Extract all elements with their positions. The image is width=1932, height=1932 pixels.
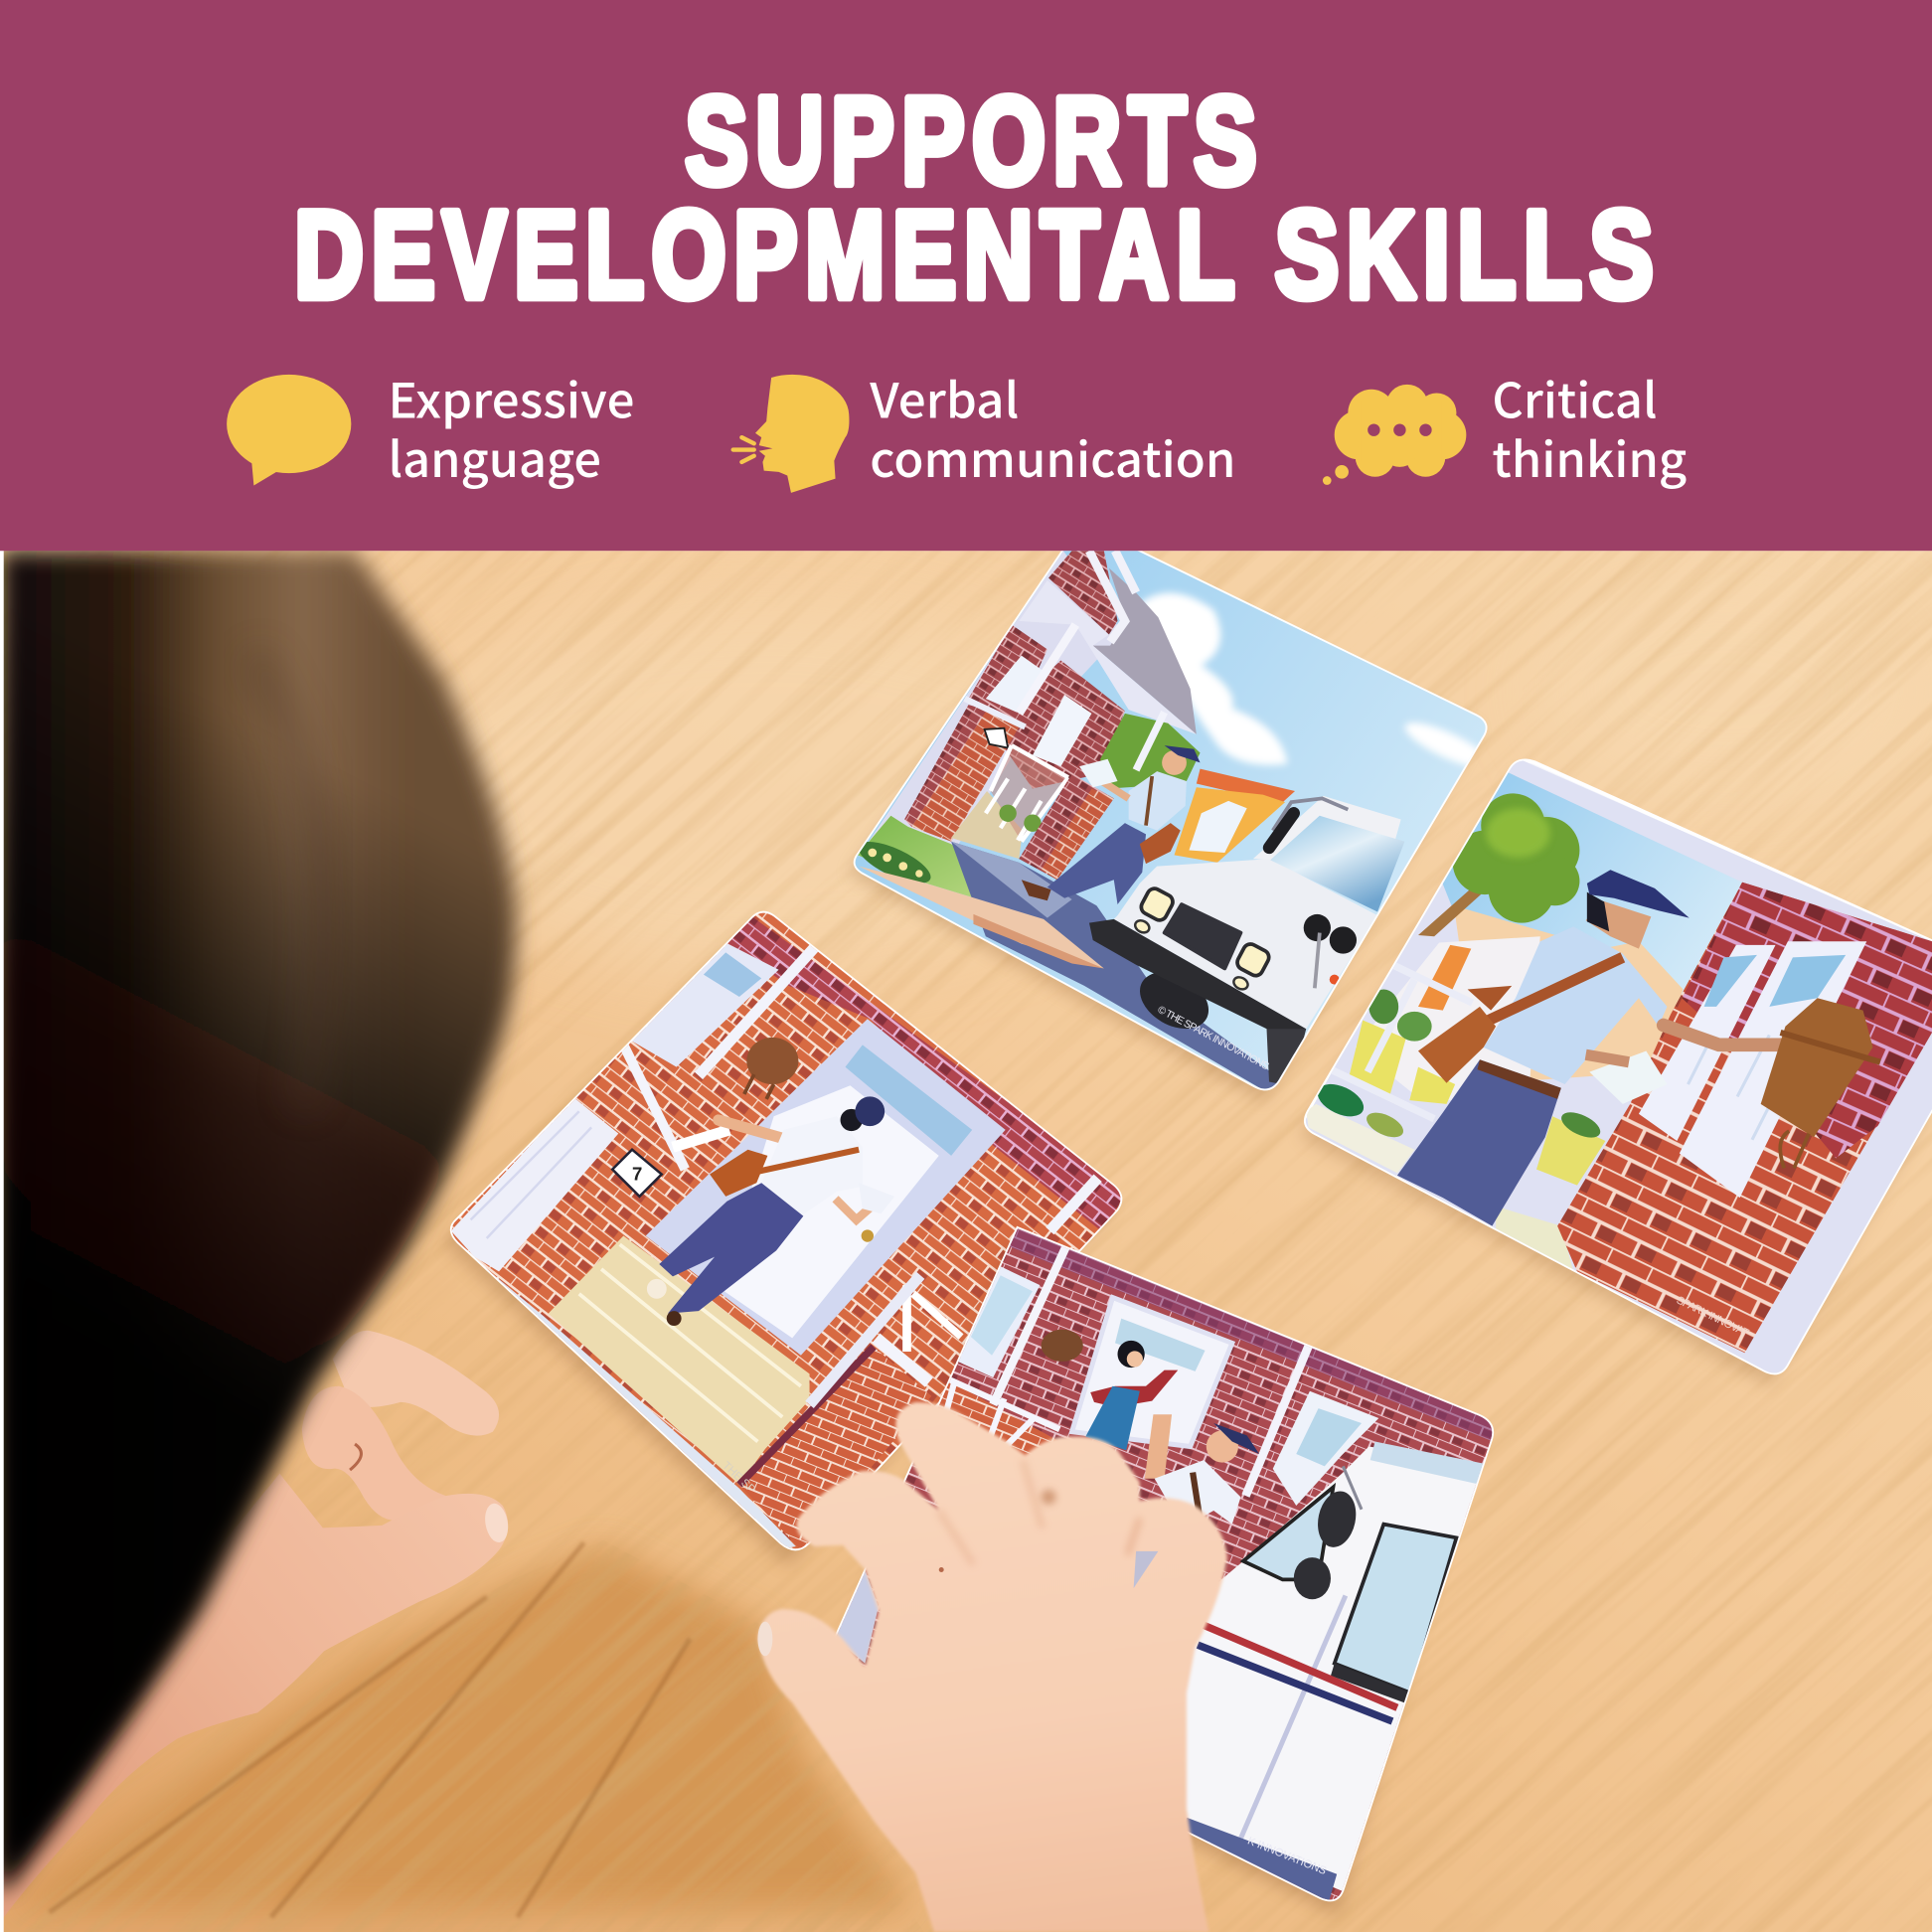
photo: card with mail truck and house bbox=[849, 524, 1496, 1101]
photo: card with waving woman and mail truck: K INNOVATIONS bbox=[1246, 1835, 1328, 1877]
skill: verbal communication bbox=[869, 362, 1236, 491]
photo: card with mailman at mailbox: SPARK INNOVAT bbox=[1675, 1294, 1751, 1340]
photo: card with mail truck and house: © THE SPARK INNOVATIONS bbox=[1156, 1004, 1271, 1072]
photo: card with mailman at front door bbox=[443, 905, 1134, 1567]
photo: child's right hand over the card bbox=[757, 1402, 1227, 1932]
photo: child's hair, blurred foreground bbox=[0, 551, 515, 1932]
icon: speech bubble bbox=[227, 375, 351, 485]
photo: card with waving woman and mail truck bbox=[826, 1219, 1510, 1915]
skill: critical thinking: thinking bbox=[1492, 421, 1687, 491]
icon: thought cloud bbox=[1323, 385, 1466, 485]
skill: verbal communication: Verbal bbox=[869, 362, 1019, 431]
photo: card with mailman at front door: THE SP bbox=[720, 1460, 757, 1496]
header panel bbox=[0, 0, 1932, 551]
skill: expressive language: language bbox=[389, 421, 601, 491]
skill: expressive language: Expressive bbox=[389, 362, 634, 431]
skill: verbal communication: communication bbox=[870, 421, 1236, 491]
title: SUPPORTS bbox=[685, 74, 1264, 211]
skill: critical thinking: Critical bbox=[1492, 362, 1658, 431]
title bbox=[294, 74, 1661, 324]
icon: speaking head bbox=[733, 375, 849, 493]
photo: card with mailman at mailbox bbox=[1300, 754, 1932, 1386]
skill: critical thinking bbox=[1492, 362, 1687, 491]
photo: card with mailman at front door: 7 bbox=[632, 1164, 642, 1185]
photo: child's left hand bbox=[0, 1331, 511, 1922]
skill: expressive language bbox=[389, 362, 634, 491]
photo: wooden table background bbox=[0, 551, 1932, 1932]
